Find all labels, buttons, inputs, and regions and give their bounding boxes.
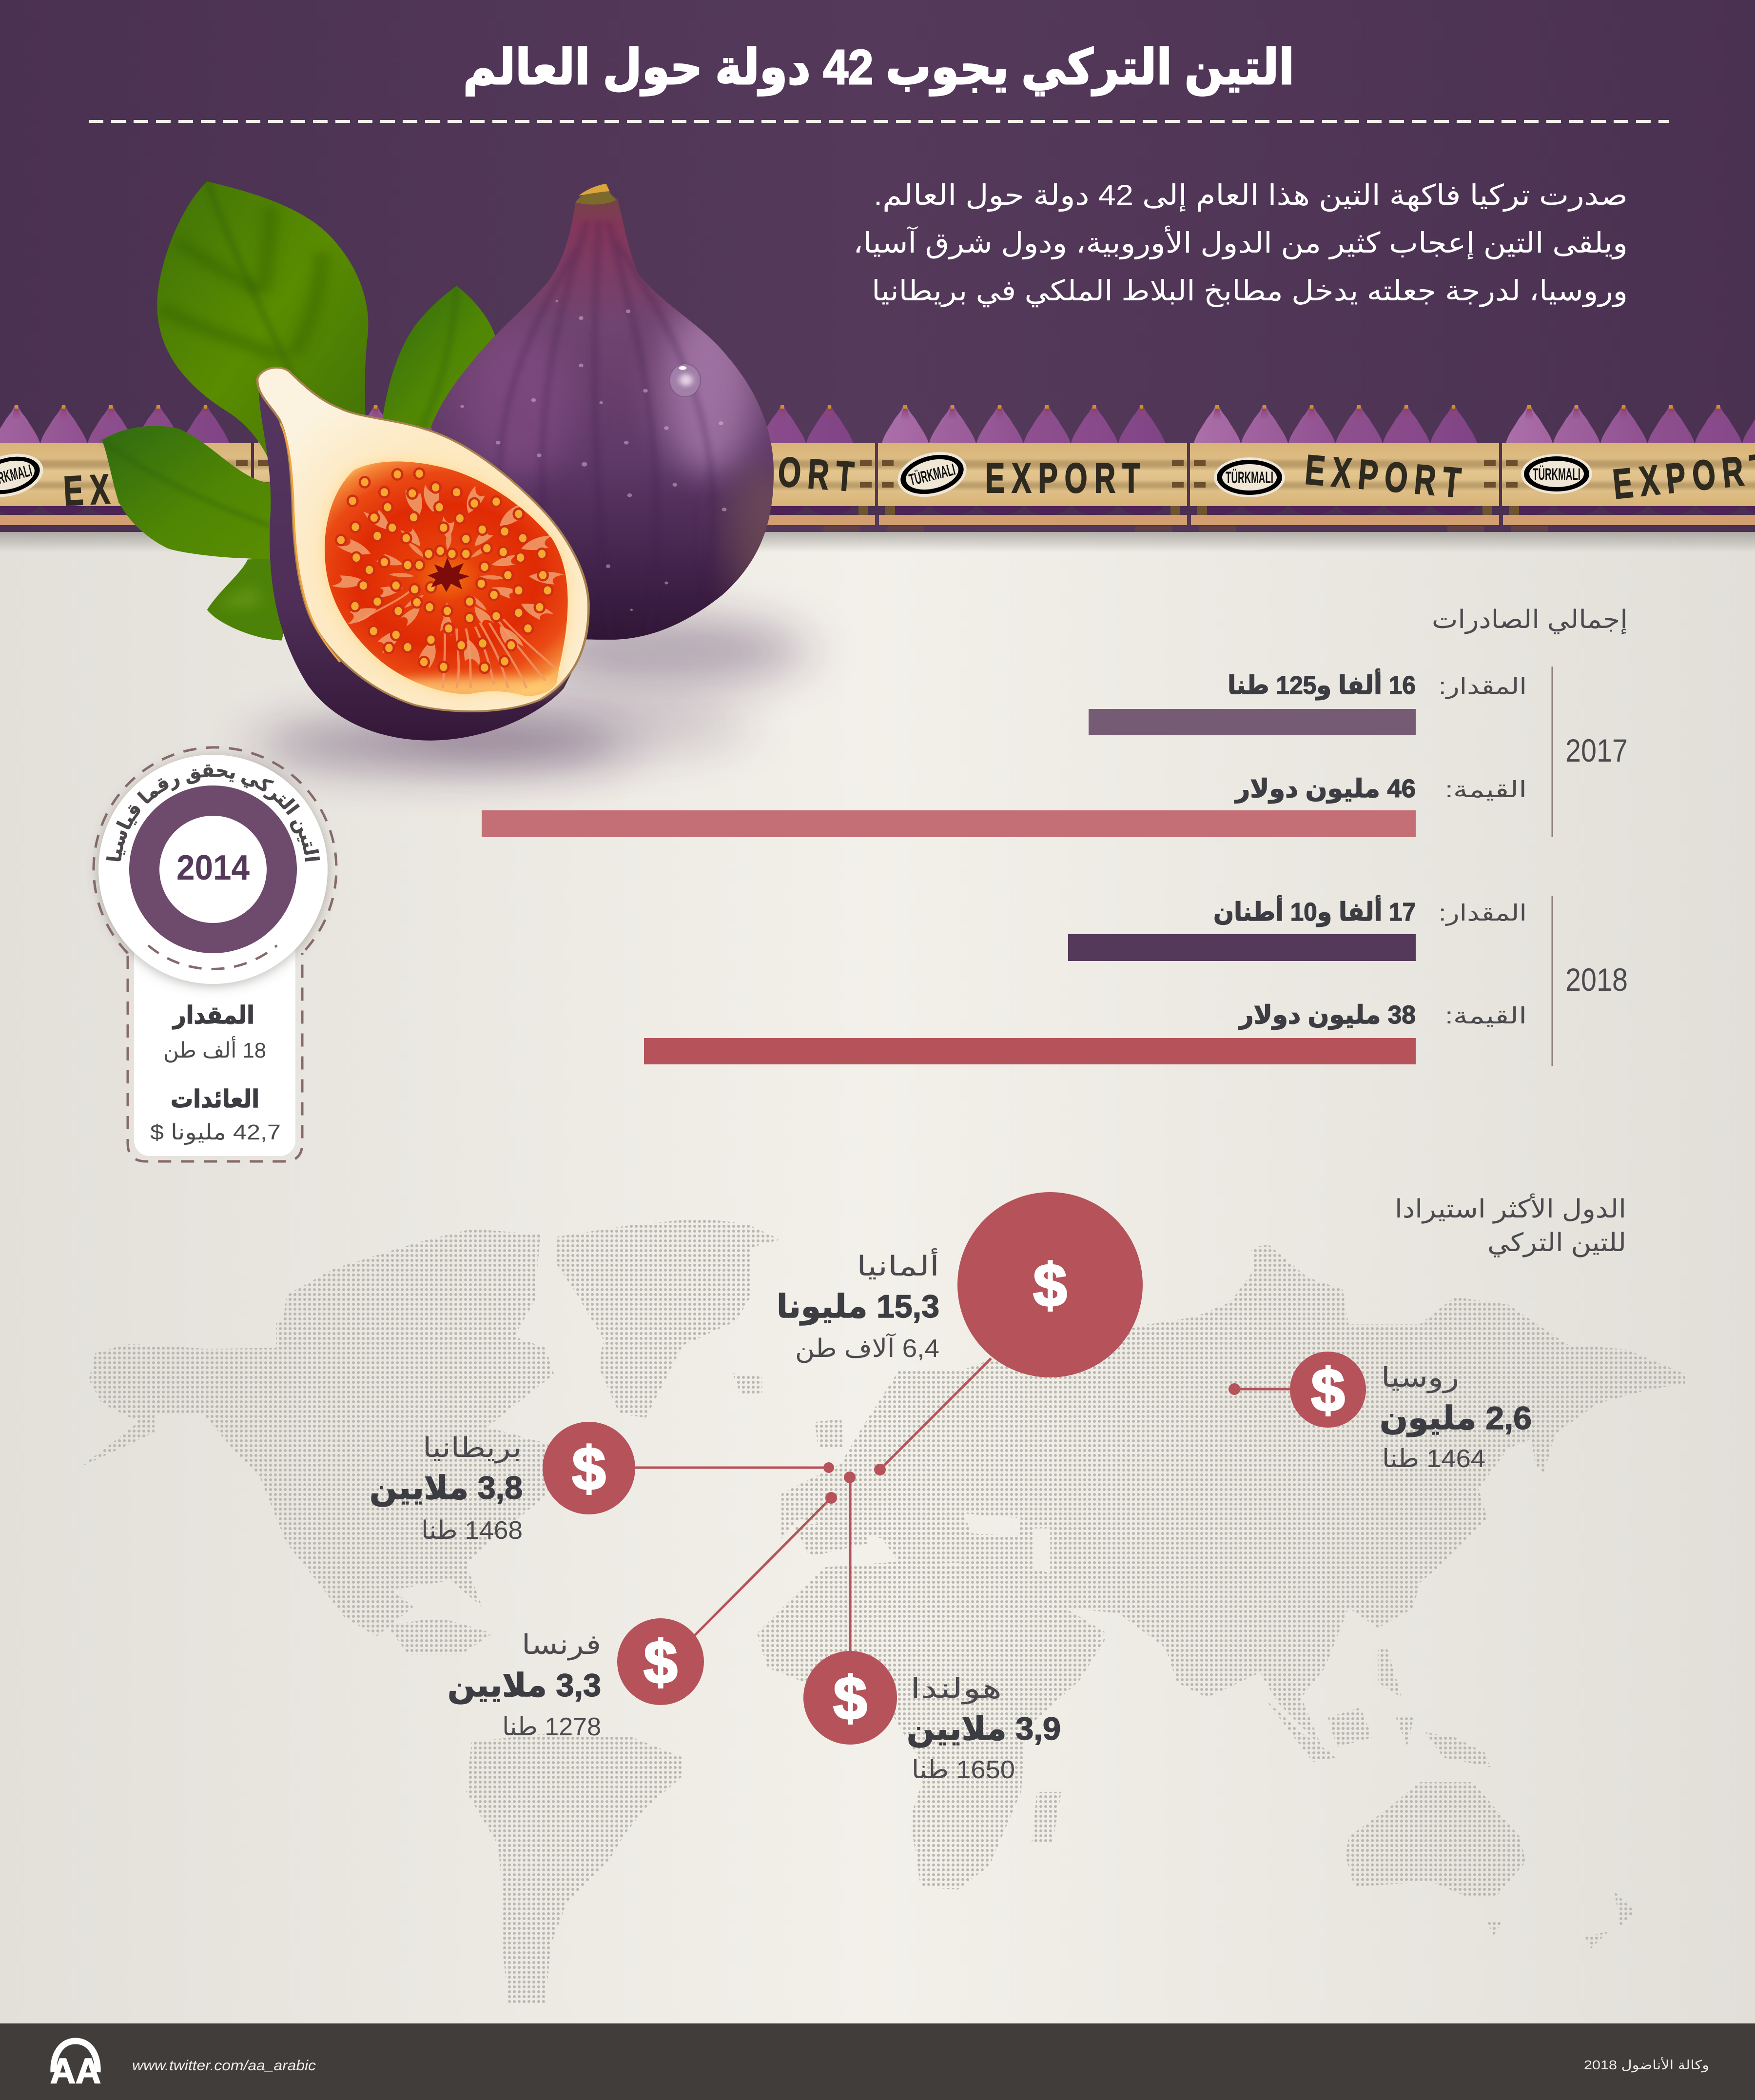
Russia label [1380, 1362, 1532, 1473]
Britain marker: $ [572, 1435, 605, 1503]
value row 2017: القيمة: [1445, 777, 1527, 802]
crate label 2: EXPORT [698, 443, 862, 501]
Germany marker: $ [1034, 1252, 1067, 1319]
Germany marker [957, 1192, 1143, 1377]
Britain label [370, 1432, 523, 1545]
value row 2018: 38 مليون دولار [1238, 1001, 1416, 1030]
badge year: 2014 [176, 848, 250, 887]
badge: 2014 record [93, 746, 337, 1162]
Britain label: 3,8 ملايين [370, 1470, 523, 1507]
Russia label: 2,6 مليون [1380, 1400, 1532, 1437]
crate label 3: TÜRKMALI [907, 460, 957, 490]
stem tip [576, 184, 616, 205]
leaf: large back [157, 181, 368, 472]
leaf: right back [382, 286, 496, 429]
dotted world map [0, 1170, 1755, 2023]
twitter handle: www.twitter.com/aa_arabic [132, 2058, 316, 2074]
Netherlands label: هولندا [910, 1673, 1002, 1705]
intro paragraph: صدرت تركيا فاكهة التين هذا العام إلى 42 دولة حول العالم. [874, 179, 1628, 212]
crate label 5 [1521, 445, 1755, 508]
2017 exports block [482, 667, 1628, 837]
Britain label: 1468 طنا [421, 1516, 523, 1545]
Netherlands marker: $ [834, 1665, 867, 1732]
Germany label: 15,3 مليونا [777, 1288, 939, 1326]
quantity row 2018: المقدار: [1439, 900, 1527, 926]
Britain marker [543, 1422, 635, 1514]
crate label 3: EXPORT [985, 455, 1147, 502]
Netherlands label: 1650 طنا [912, 1756, 1015, 1784]
France label: فرنسا [522, 1629, 601, 1661]
header panel [0, 0, 1755, 532]
AA logo: AA [50, 2052, 101, 2091]
year 2017: 2017 [1565, 732, 1628, 768]
France label [448, 1629, 601, 1741]
badge quantity: 18 ألف طن [163, 1036, 266, 1063]
floor shadows [256, 617, 806, 770]
crate label 1 [0, 447, 227, 515]
badge quantity [163, 1001, 266, 1063]
map section heading: للتين التركي [1487, 1229, 1626, 1257]
value row 2018 [644, 1001, 1527, 1064]
France label: 3,3 ملايين [448, 1667, 601, 1704]
value row 2017: 46 مليون دولار [1234, 775, 1416, 804]
exports section heading: إجمالي الصادرات [1432, 606, 1628, 634]
Netherlands label: 3,9 ملايين [907, 1710, 1061, 1747]
title: التين التركي يجوب 42 دولة حول العالم [463, 40, 1294, 96]
Russia marker [1290, 1352, 1366, 1428]
Netherlands marker [803, 1651, 897, 1745]
badge curved text: التين التركي يحقق رقما قياسيا [106, 765, 320, 862]
France marker: $ [644, 1629, 677, 1696]
fig seeds [335, 467, 554, 674]
leaf: lower left [102, 426, 284, 561]
value row 2017 [482, 775, 1527, 837]
crate label 4: EXPORT [1303, 446, 1469, 507]
intro paragraph: وروسيا، لدرجة جعلته يدخل مطابخ البلاط الملكي في بريطانيا [872, 275, 1628, 308]
agency credit: وكالة الأناضول 2018 [1584, 2057, 1709, 2073]
badge revenue: 42,7 مليونا $ [150, 1120, 281, 1145]
pulp centre star [428, 558, 469, 592]
Britain label: بريطانيا [423, 1432, 522, 1464]
year 2018: 2018 [1565, 962, 1628, 998]
fig skin [258, 386, 583, 741]
halved fig [257, 368, 588, 741]
badge circle [98, 755, 328, 984]
Russia marker: $ [1311, 1357, 1345, 1424]
map section heading: الدول الأكثر استيرادا [1395, 1193, 1626, 1224]
badge revenue [150, 1085, 281, 1145]
cut face [257, 368, 588, 711]
connector lines and dots [634, 1358, 1292, 1658]
quantity row 2018: 17 ألفا و10 أطنان [1213, 895, 1416, 927]
figs illustration [102, 181, 806, 770]
crate label 4: TÜRKMALI [1226, 469, 1273, 487]
Netherlands label [907, 1673, 1061, 1784]
quantity row 2017 [1089, 668, 1527, 735]
leaf: lower bottom [207, 558, 303, 640]
Germany label: ألمانيا [857, 1248, 939, 1281]
crate label 5: TÜRKMALI [1533, 465, 1580, 484]
footer bar [0, 2023, 1755, 2100]
crate label 4 [1214, 446, 1469, 507]
France marker [617, 1618, 704, 1705]
export crates row [0, 405, 1755, 532]
intro paragraph: ويلقى التين إعجاب كثير من الدول الأوروبية، ودول شرق آسيا، [853, 225, 1628, 260]
map section heading [1395, 1193, 1626, 1257]
shelf shadow [0, 532, 1755, 552]
fig speckles [460, 300, 726, 611]
Russia label: 1464 طنا [1382, 1445, 1485, 1473]
quantity row 2017: 16 ألفا و125 طنا [1228, 668, 1416, 700]
fig pulp [325, 461, 568, 696]
crate label 1: EXPORT [62, 460, 227, 515]
Germany label: 6,4 آلاف طن [795, 1333, 939, 1363]
badge revenue: العائدات [171, 1085, 259, 1113]
2018 exports block [644, 895, 1628, 1066]
badge card [134, 902, 295, 1156]
France label: 1278 طنا [502, 1713, 601, 1741]
Russia label: روسيا [1381, 1362, 1459, 1393]
back whole fig [431, 184, 797, 640]
intro paragraph [853, 179, 1628, 308]
quantity row 2017: المقدار: [1439, 673, 1527, 699]
crate label 3 [893, 445, 1147, 504]
Germany label [777, 1248, 939, 1363]
water drop [670, 364, 701, 397]
quantity row 2018 [1068, 895, 1527, 961]
badge quantity: المقدار [172, 1001, 254, 1029]
value row 2018: القيمة: [1445, 1003, 1527, 1028]
